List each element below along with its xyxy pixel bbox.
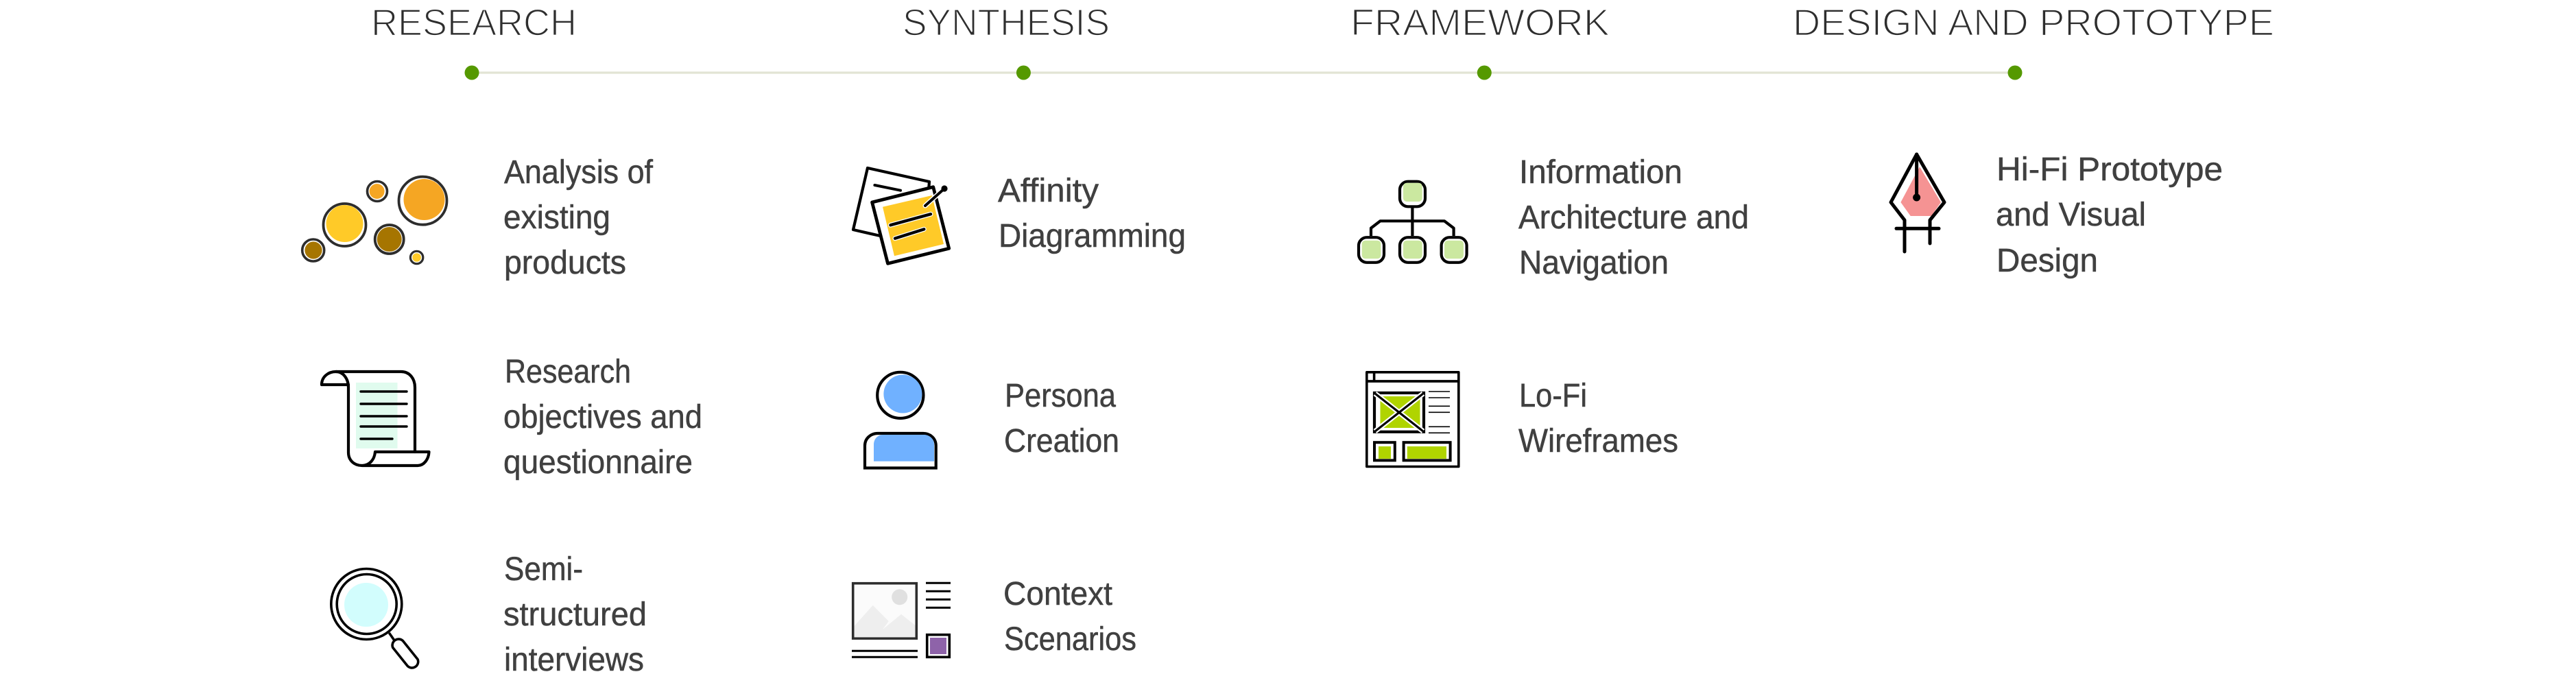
label: hi-fi prototype and visual design: and Visual — [1996, 197, 2146, 233]
timeline dot: research — [465, 66, 479, 80]
icon: scroll — [322, 372, 429, 466]
label: semi-structured interviews: structured — [503, 597, 647, 633]
icon: wireframe — [1366, 372, 1459, 466]
label: analysis of existing products: products — [504, 245, 626, 281]
label: analysis of existing products — [503, 154, 654, 281]
timeline dot: framework — [1477, 66, 1492, 80]
timeline dot: design and prototype — [2008, 66, 2022, 80]
icon: context scenarios — [852, 583, 951, 657]
heading: SYNTHESIS: SYNTHESIS — [903, 1, 1110, 44]
label: lo-fi wireframes: Wireframes — [1518, 423, 1678, 459]
label: semi-structured interviews: Semi- — [504, 551, 583, 588]
timeline dot: synthesis — [1016, 66, 1031, 80]
label: information architecture and navigation: Architecture and — [1518, 200, 1749, 236]
label: research objectives and questionnaire: objectives and — [503, 399, 702, 435]
icon: magnifier — [331, 569, 418, 668]
heading: RESEARCH: RESEARCH — [371, 1, 577, 44]
icon: persona — [865, 372, 936, 468]
heading: FRAMEWORK: FRAMEWORK — [1350, 1, 1610, 44]
label: context scenarios — [1003, 576, 1136, 658]
icon: bubbles — [302, 177, 447, 264]
timeline — [465, 66, 2022, 80]
label: hi-fi prototype and visual design: Hi-Fi Prototype — [1996, 152, 2223, 188]
label: analysis of existing products: Analysis of — [504, 154, 654, 191]
label: persona creation: Creation — [1004, 423, 1119, 459]
heading: DESIGN AND PROTOTYPE: DESIGN AND PROTOTYPE — [1793, 1, 2274, 44]
label: hi-fi prototype and visual design — [1996, 152, 2223, 279]
label: affinity diagramming: Diagramming — [999, 218, 1186, 254]
icon: information architecture — [1359, 182, 1467, 263]
label: information architecture and navigation: Navigation — [1519, 245, 1669, 281]
label: analysis of existing products: existing — [503, 200, 610, 236]
label: semi-structured interviews — [503, 551, 647, 678]
label: persona creation — [1004, 378, 1119, 459]
label: context scenarios: Context — [1003, 576, 1112, 612]
label: information architecture and navigation — [1518, 154, 1749, 281]
label: persona creation: Persona — [1005, 378, 1116, 414]
label: information architecture and navigation: Information — [1519, 154, 1682, 191]
label: research objectives and questionnaire: questionnaire — [503, 444, 693, 481]
label: semi-structured interviews: interviews — [504, 642, 644, 678]
label: context scenarios: Scenarios — [1004, 621, 1136, 658]
icon: pen tool — [1891, 154, 1944, 252]
icon: affinity notes — [853, 168, 949, 263]
label: hi-fi prototype and visual design: Design — [1996, 243, 2098, 279]
label: lo-fi wireframes — [1518, 378, 1678, 459]
label: research objectives and questionnaire: Research — [505, 354, 631, 390]
label: affinity diagramming — [998, 173, 1186, 254]
label: affinity diagramming: Affinity — [998, 173, 1099, 209]
label: research objectives and questionnaire — [503, 354, 702, 481]
label: lo-fi wireframes: Lo-Fi — [1519, 378, 1587, 414]
